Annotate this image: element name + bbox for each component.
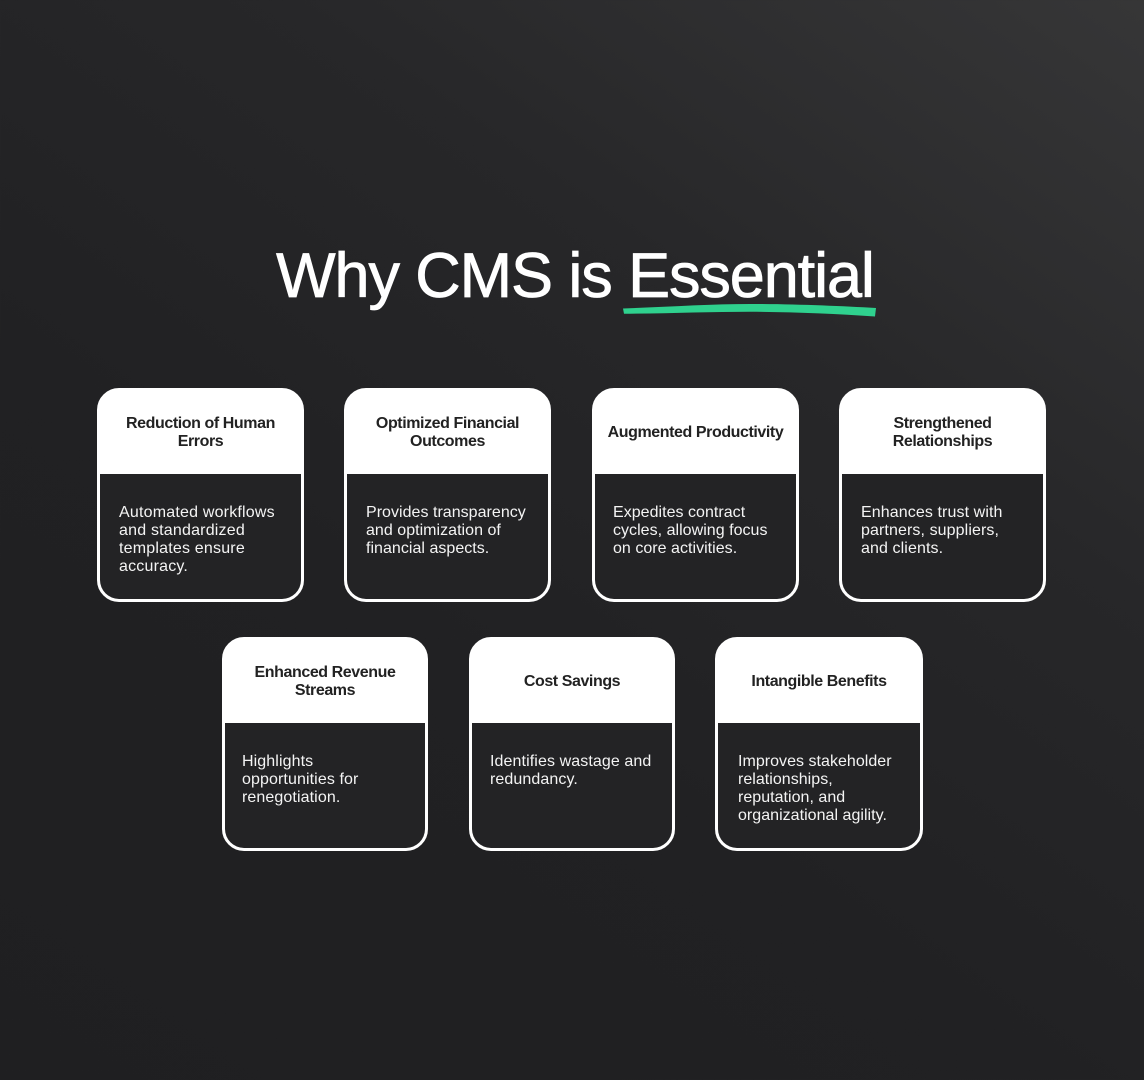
card description panel: reputation, and: [738, 789, 845, 806]
card description panel: renegotiation.: [242, 789, 340, 806]
card heading: Optimized Financial: [376, 415, 519, 432]
card description panel: Automated workflows: [119, 504, 275, 521]
card: Augmented Productivity: [592, 388, 799, 602]
card heading: Reduction of Human: [126, 415, 275, 432]
card description panel: Enhances trust with: [861, 504, 1003, 521]
card heading: Cost Savings: [524, 673, 620, 690]
card description panel: templates ensure: [119, 540, 245, 557]
card description panel: [100, 474, 301, 599]
card: Enhanced Revenue Streams: [222, 637, 428, 851]
card heading: Strengthened: [893, 415, 992, 432]
card: Intangible Benefits: [715, 637, 923, 851]
card description panel: and clients.: [861, 540, 943, 557]
card: Reduction of Human Errors: [97, 388, 304, 602]
card description panel: partners, suppliers,: [861, 522, 999, 539]
card description panel: Expedites contract: [613, 504, 745, 521]
card description panel: accuracy.: [119, 558, 188, 575]
card heading: Augmented Productivity: [608, 424, 783, 441]
card heading: Intangible Benefits: [751, 673, 887, 690]
card description panel: [718, 723, 920, 848]
card description panel: Improves stakeholder: [738, 753, 892, 770]
card description panel: Identifies wastage and: [490, 753, 651, 770]
card: Cost Savings: [469, 637, 675, 851]
card heading: [893, 415, 992, 450]
card: Optimized Financial Outcomes: [344, 388, 551, 602]
title underline: [623, 304, 876, 316]
card: Strengthened Relationships: [839, 388, 1046, 602]
card heading: [376, 415, 519, 450]
card heading: Enhanced Revenue: [255, 664, 395, 681]
card description panel: [842, 474, 1043, 599]
card description panel: [347, 474, 548, 599]
card description panel: redundancy.: [490, 771, 578, 788]
card heading: Relationships: [893, 433, 992, 450]
card description panel: organizational agility.: [738, 807, 887, 824]
card description panel: and standardized: [119, 522, 245, 539]
card heading: [255, 664, 396, 699]
card description panel: [225, 723, 425, 848]
card heading: Outcomes: [410, 433, 485, 450]
card heading: Streams: [295, 682, 355, 699]
card description panel: on core activities.: [613, 540, 737, 557]
card description panel: Highlights: [242, 753, 313, 770]
card description panel: cycles, allowing focus: [613, 522, 768, 539]
card description panel: relationships,: [738, 771, 833, 788]
card description panel: and optimization of: [366, 522, 501, 539]
card description panel: opportunities for: [242, 771, 358, 788]
card description panel: Provides transparency: [366, 504, 526, 521]
card description panel: financial aspects.: [366, 540, 489, 557]
card heading: [126, 415, 275, 450]
card description panel: [595, 474, 796, 599]
title: Why CMS is Essential: [276, 241, 874, 311]
card heading: Errors: [178, 433, 223, 450]
card description panel: [472, 723, 672, 848]
